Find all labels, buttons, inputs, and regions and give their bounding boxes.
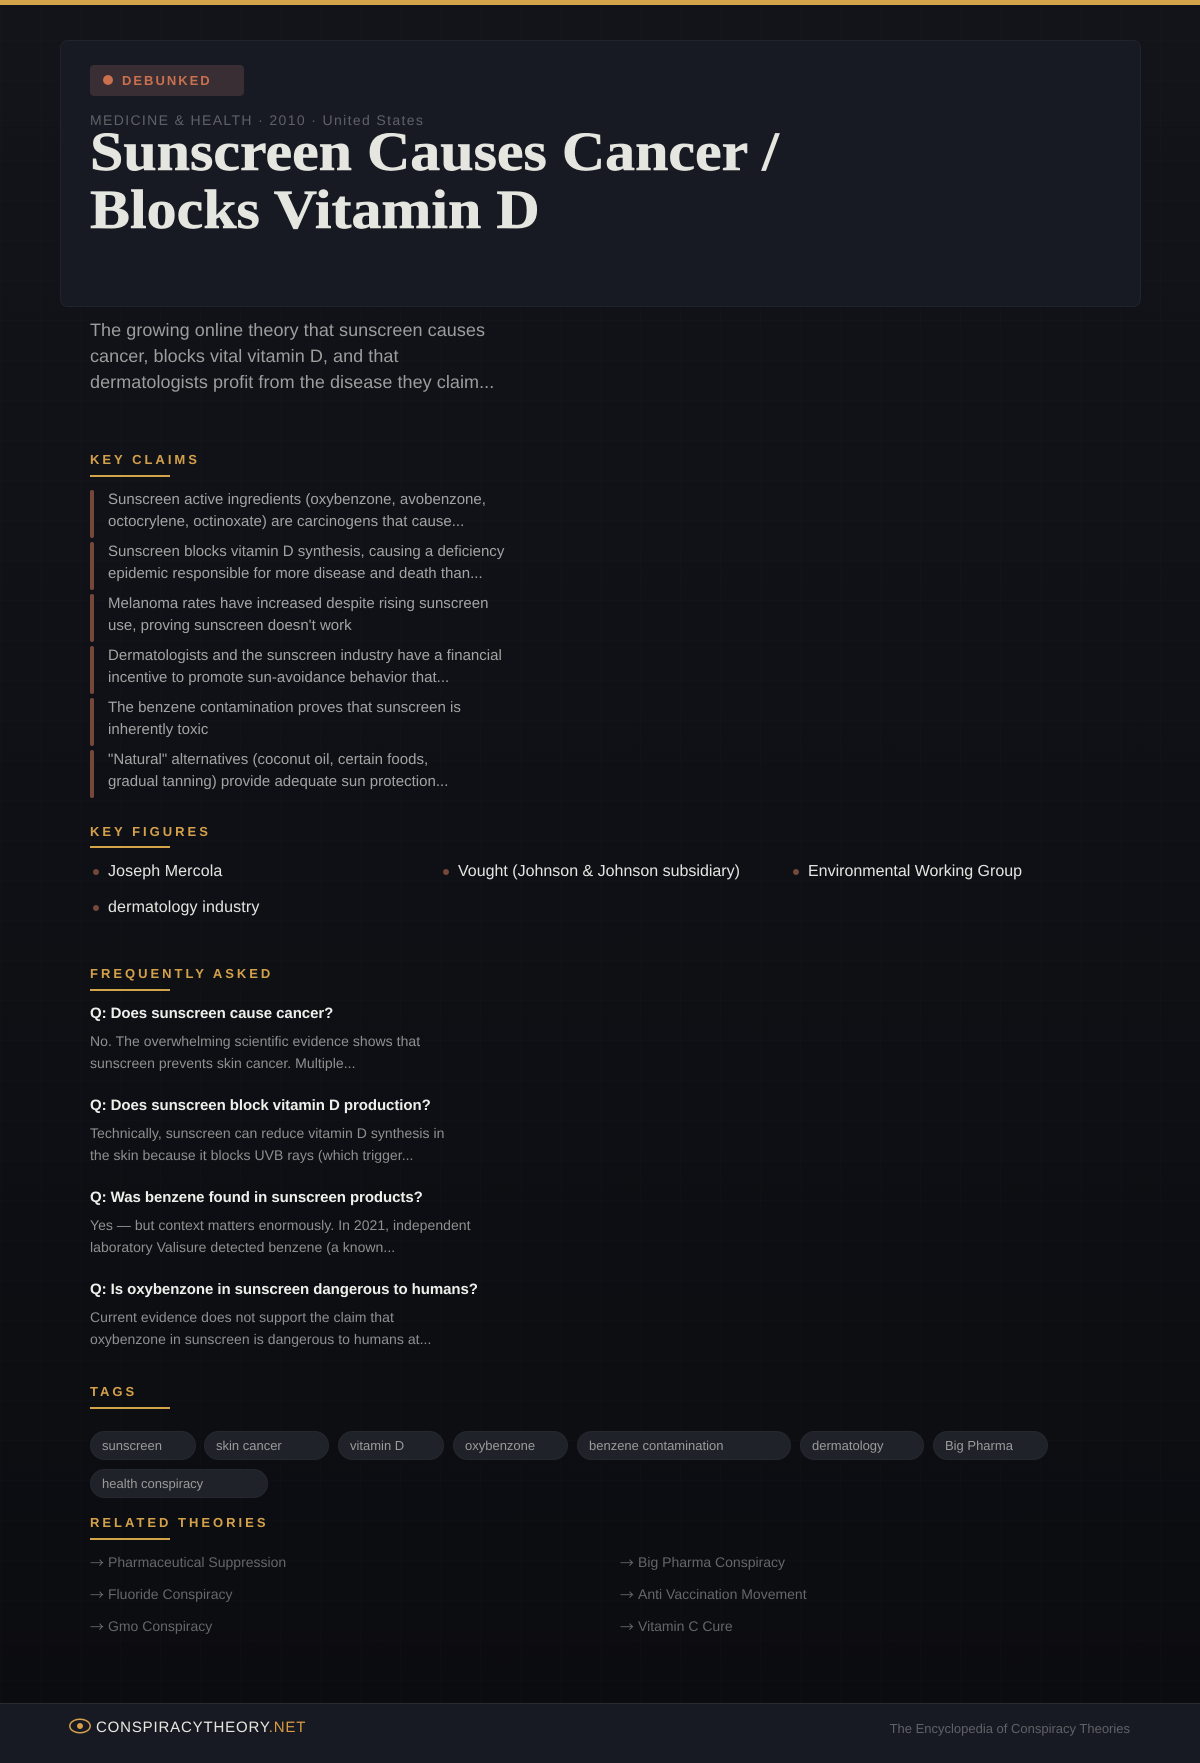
claim 2: Sunscreen blocks vitamin D synthesis, causing a deficiency: [108, 543, 504, 560]
faq 1: sunscreen prevents skin cancer. Multiple...: [90, 1055, 356, 1071]
faq 1: Q: Does sunscreen cause cancer?: [90, 1005, 333, 1022]
related: Anti Vaccination Movement: Anti Vaccination Movement: [638, 1586, 807, 1602]
related: Pharmaceutical Suppression: →: [90, 1553, 104, 1573]
heading: tags: TAGS: [90, 1384, 137, 1399]
intro description: cancer, blocks vital vitamin D, and that: [90, 346, 399, 366]
claim 2: epidemic responsible for more disease and death than...: [108, 565, 483, 582]
faq 4: oxybenzone in sunscreen is dangerous to humans at...: [90, 1331, 431, 1347]
icon: status dot: [103, 75, 113, 85]
top accent bar: [0, 0, 1200, 5]
claim 4: incentive to promote sun-avoidance behavior that...: [108, 669, 449, 686]
figure: dermatology industry: dermatology industry: [108, 899, 260, 916]
tag: vitamin D: vitamin D: [350, 1438, 404, 1453]
faq 2: [90, 1097, 444, 1163]
tag: oxybenzone: [453, 1431, 568, 1460]
related: Fluoride Conspiracy: [90, 1585, 232, 1605]
faq 4: [90, 1281, 478, 1347]
claim 6: "Natural" alternatives (coconut oil, certain foods,: [108, 751, 428, 768]
status badge: debunked: [90, 65, 244, 96]
badge label: DEBUNKED: [122, 73, 212, 88]
claim 1: octocrylene, octinoxate) are carcinogens that cause...: [108, 513, 464, 530]
tag: skin cancer: [204, 1431, 329, 1460]
related: Gmo Conspiracy: [90, 1617, 212, 1637]
tag: Big Pharma: Big Pharma: [945, 1438, 1013, 1453]
tag: dermatology: [800, 1431, 924, 1460]
footer: [0, 1703, 1200, 1763]
faq 1: No. The overwhelming scientific evidence shows that: [90, 1033, 420, 1049]
figure: Joseph Mercola: Joseph Mercola: [108, 863, 222, 880]
panel: hero card: [60, 40, 1141, 307]
intro description: dermatologists profit from the disease they claim...: [90, 372, 494, 392]
footer tagline: The Encyclopedia of Conspiracy Theories: [890, 1721, 1130, 1736]
tag: Big Pharma: [933, 1431, 1048, 1460]
related: Anti Vaccination Movement: →: [620, 1585, 634, 1605]
tag: health conspiracy: health conspiracy: [102, 1476, 203, 1491]
faq 4: Current evidence does not support the claim that: [90, 1309, 394, 1325]
tag: sunscreen: sunscreen: [102, 1438, 162, 1453]
claim 1: [90, 490, 486, 538]
tag: vitamin D: [338, 1431, 444, 1460]
related: Big Pharma Conspiracy: →: [620, 1553, 634, 1573]
claim 3: [90, 594, 488, 642]
related: Vitamin C Cure: Vitamin C Cure: [638, 1618, 733, 1634]
tag: skin cancer: skin cancer: [216, 1438, 282, 1453]
intro description: The growing online theory that sunscreen causes: [90, 320, 485, 340]
tag: health conspiracy: [90, 1469, 268, 1498]
faq 3: laboratory Valisure detected benzene (a known...: [90, 1239, 395, 1255]
claim 4: Dermatologists and the sunscreen industry have a financial: [108, 647, 502, 664]
faq 3: Q: Was benzene found in sunscreen products?: [90, 1189, 423, 1206]
related: Vitamin C Cure: [620, 1617, 733, 1637]
faq 2: the skin because it blocks UVB rays (which trigger...: [90, 1147, 413, 1163]
heading: frequently asked: FREQUENTLY ASKED: [90, 966, 273, 981]
heading: key claims: KEY CLAIMS: [90, 452, 200, 467]
logo wordmark: CONSPIRACYTHEORY.NET: [96, 1719, 306, 1736]
tag: benzene contamination: [577, 1431, 791, 1460]
related: Gmo Conspiracy: Gmo Conspiracy: [108, 1618, 212, 1634]
claim 5: inherently toxic: [108, 721, 208, 738]
tag: oxybenzone: oxybenzone: [465, 1438, 535, 1453]
claim 5: [90, 698, 461, 746]
heading: key figures: KEY FIGURES: [90, 824, 211, 839]
claim 2: [90, 542, 504, 590]
tag: benzene contamination: benzene contamination: [589, 1438, 723, 1453]
related: Big Pharma Conspiracy: Big Pharma Conspiracy: [638, 1554, 785, 1570]
related: Vitamin C Cure: →: [620, 1617, 634, 1637]
claim 6: [90, 750, 448, 798]
claim 4: [90, 646, 502, 694]
category and date line: MEDICINE & HEALTH · 2010 · United States: [90, 112, 424, 128]
faq 3: [90, 1189, 471, 1255]
claim 1: Sunscreen active ingredients (oxybenzone, avobenzone,: [108, 491, 486, 508]
title: Blocks Vitamin D: [90, 180, 540, 240]
intro description: [90, 320, 494, 392]
related: Pharmaceutical Suppression: Pharmaceutical Suppression: [108, 1554, 286, 1570]
related: Fluoride Conspiracy: →: [90, 1585, 104, 1605]
claim 3: use, proving sunscreen doesn't work: [108, 617, 352, 634]
faq 3: Yes — but context matters enormously. In 2021, independent: [90, 1217, 471, 1233]
heading: related theories: RELATED THEORIES: [90, 1515, 268, 1530]
title: Sunscreen Causes Cancer /: [90, 122, 779, 183]
tag: sunscreen: [90, 1431, 196, 1460]
figure: Vought: Vought (Johnson & Johnson subsidiary): [458, 863, 740, 880]
tag: dermatology: dermatology: [812, 1438, 884, 1453]
related: Fluoride Conspiracy: Fluoride Conspiracy: [108, 1586, 232, 1602]
related: Gmo Conspiracy: →: [90, 1617, 104, 1637]
faq 2: Q: Does sunscreen block vitamin D production?: [90, 1097, 431, 1114]
faq 1: [90, 1005, 420, 1071]
claim 5: The benzene contamination proves that sunscreen is: [108, 699, 461, 716]
icon: eye logo: [69, 1718, 91, 1734]
claim 3: Melanoma rates have increased despite rising sunscreen: [108, 595, 488, 612]
figure: Environmental Working Group: Environmental Working Group: [808, 863, 1022, 880]
faq 2: Technically, sunscreen can reduce vitamin D synthesis in: [90, 1125, 444, 1141]
claim 6: gradual tanning) provide adequate sun protection...: [108, 773, 448, 790]
title: [90, 122, 780, 240]
faq 4: Q: Is oxybenzone in sunscreen dangerous to humans?: [90, 1281, 478, 1298]
